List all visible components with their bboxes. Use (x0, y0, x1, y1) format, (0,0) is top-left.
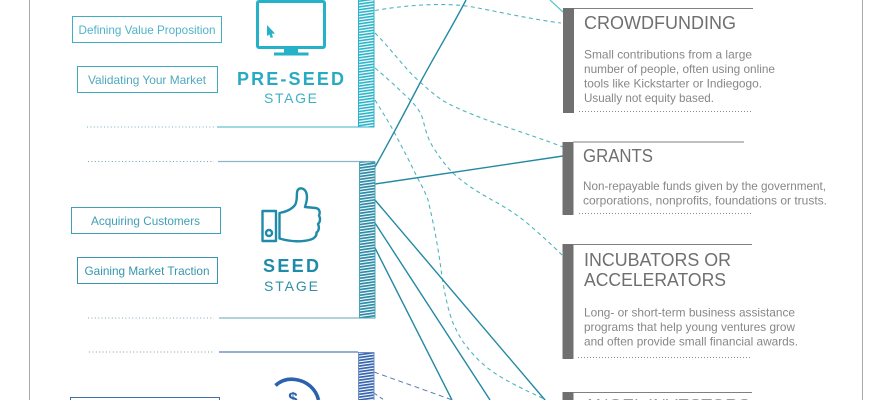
tag: validating your market (78, 66, 218, 92)
heading: stage: STAGE (264, 90, 317, 106)
angel top rule (573, 392, 752, 394)
panel: incubators or accelerators (562, 244, 798, 359)
pre-seed hatched bar (358, 0, 374, 127)
grants description: corporations, nonprofits, foundations or trusts. (583, 194, 827, 208)
crowdfunding top rule (574, 8, 753, 10)
incubators description: and often provide small financial awards. (584, 334, 798, 348)
growth top rule (219, 351, 358, 353)
icon: dollar coin (276, 379, 318, 400)
seed divider (88, 318, 359, 352)
seed hatched bar (360, 162, 375, 318)
pre-seed divider (87, 127, 358, 162)
tag: gaining market traction: Gaining Market Traction (84, 264, 210, 278)
panel: seed stage (72, 162, 375, 352)
icon: thumbs up (262, 188, 320, 241)
tag: acquiring customers (72, 208, 220, 234)
seed top rule (218, 160, 375, 162)
heading: pre-seed: PRE-SEED (237, 69, 344, 89)
icon: monitor with cursor (258, 2, 324, 56)
tag: gaining market traction (78, 258, 218, 284)
panel: angel investors (cropped) (562, 392, 752, 400)
heading: stage: STAGE (264, 278, 318, 294)
grants description (583, 179, 827, 208)
incubators side bar (562, 244, 574, 359)
grants side bar (562, 142, 574, 215)
cropped tag box (70, 398, 220, 400)
crowdfunding description: Small contributions from a large (584, 48, 752, 62)
grants title: GRANTS (583, 146, 653, 166)
tag: acquiring customers: Acquiring Customers (91, 214, 200, 228)
crowdfunding description: number of people, often using online (584, 62, 775, 76)
grants top rule (573, 141, 744, 143)
panel: crowdfunding (563, 8, 775, 113)
crowdfunding description: tools like Kickstarter or Indiegogo. (584, 76, 762, 90)
connector lines (374, 0, 563, 400)
incubators description: Long- or short-term business assistance (584, 306, 795, 320)
growth hatched bar (358, 352, 374, 400)
incubators title: INCUBATORS OR (584, 250, 731, 270)
angel side bar (562, 392, 574, 400)
crowdfunding description (584, 48, 775, 105)
crowdfunding side bar (563, 8, 574, 113)
incubators title (584, 250, 731, 290)
incubators description (584, 306, 798, 348)
panel: growth stage (cropped) (70, 352, 374, 400)
tag: defining value proposition: Defining Value Proposition (78, 23, 216, 37)
incubators title: ACCELERATORS (584, 270, 726, 290)
incubators description: programs that help young ventures grow (584, 320, 795, 334)
panel: pre-seed stage (72, 0, 374, 162)
tag: defining value proposition (72, 16, 222, 42)
incubators top rule (573, 244, 752, 246)
grants description: Non-repayable funds given by the government, (583, 179, 826, 193)
tag: validating your market: Validating Your Market (88, 73, 207, 87)
crowdfunding title: CROWDFUNDING (584, 13, 736, 33)
heading: seed: SEED (263, 256, 319, 276)
panel: grants (562, 142, 827, 215)
crowdfunding description: Usually not equity based. (584, 91, 714, 105)
